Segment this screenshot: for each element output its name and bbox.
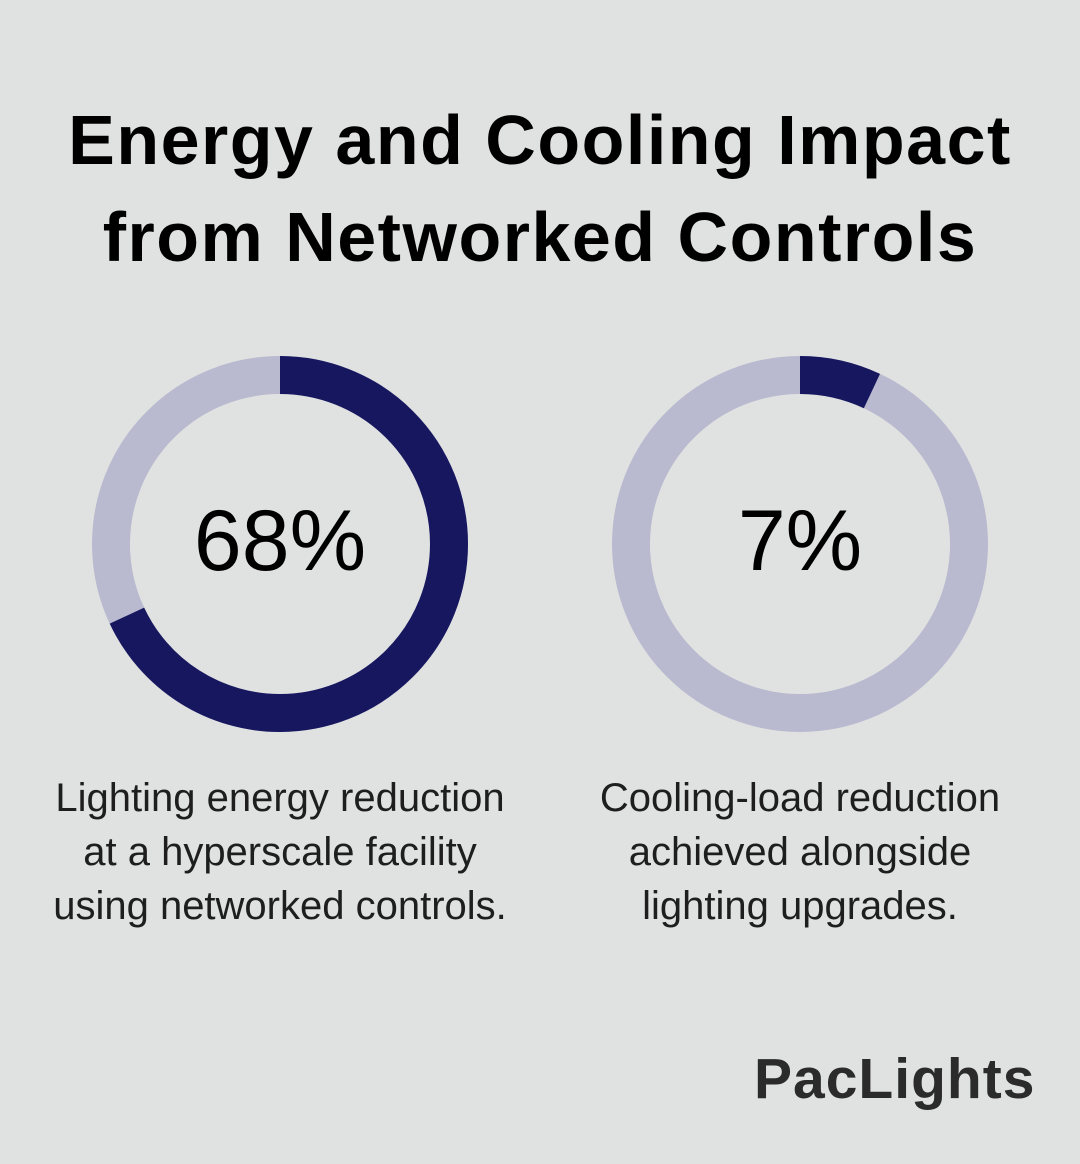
title [68, 101, 1012, 276]
caption: cooling: achieved alongside [629, 830, 971, 874]
caption: cooling: lighting upgrades. [642, 884, 958, 928]
caption: lighting [53, 776, 507, 928]
caption: cooling: Cooling-load reduction [600, 776, 1000, 820]
caption: lighting: using networked controls. [53, 884, 507, 928]
value 7%: 7% [738, 493, 862, 589]
donut chart: 68% [92, 356, 468, 732]
donut chart: 7% [612, 356, 988, 732]
title: from Networked Controls [103, 198, 977, 276]
caption: cooling [600, 776, 1000, 928]
caption: lighting: Lighting energy reduction [55, 776, 505, 820]
value 68%: 68% [194, 493, 366, 589]
title: Energy and Cooling Impact [68, 101, 1012, 179]
logo: PacLights [754, 1047, 1035, 1111]
caption: lighting: at a hyperscale facility [83, 830, 477, 874]
